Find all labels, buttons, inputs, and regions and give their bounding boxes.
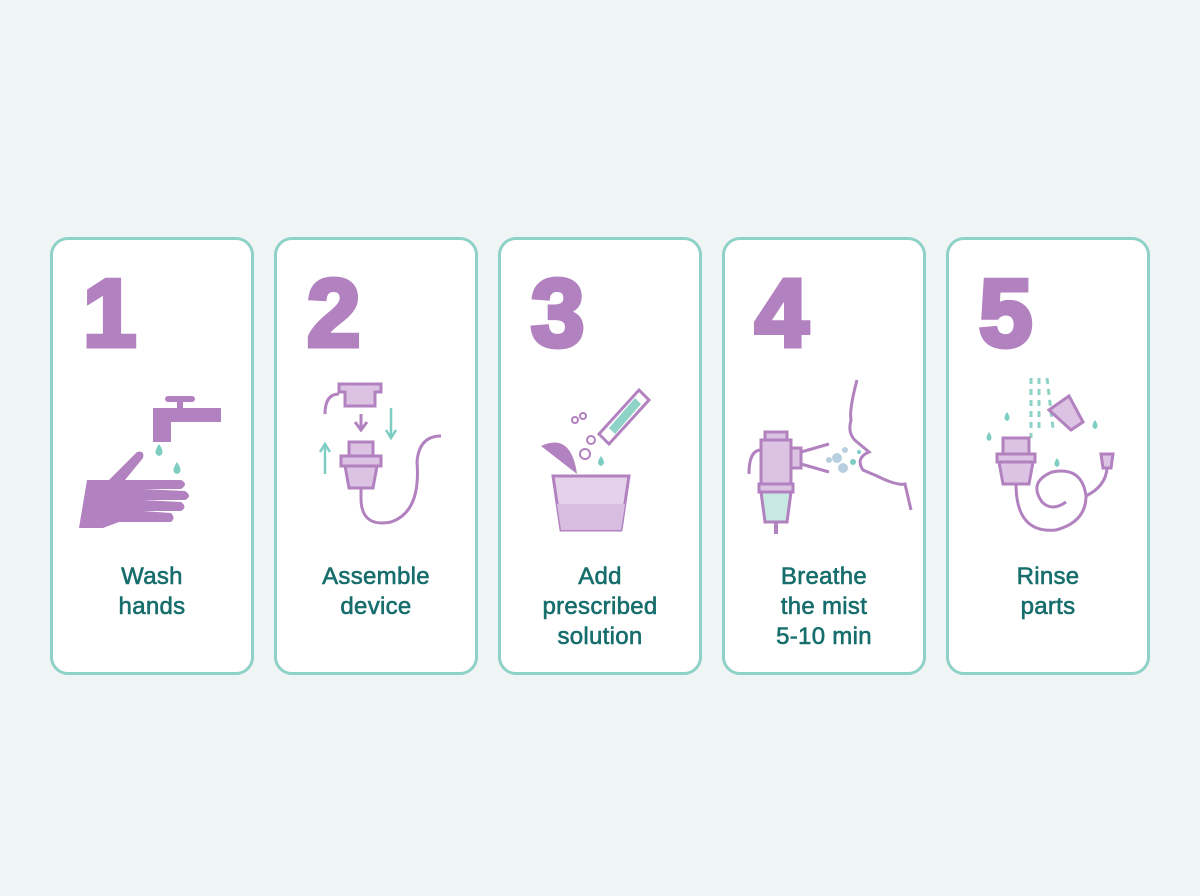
label: prescribed bbox=[542, 593, 658, 620]
label: 5-10 min bbox=[776, 623, 872, 650]
icon: hand under tap bbox=[79, 396, 221, 528]
label: Add bbox=[578, 563, 622, 590]
number 5: 5 bbox=[979, 260, 1032, 367]
label: Rinse bbox=[1017, 563, 1079, 590]
number 1: 1 bbox=[83, 260, 136, 367]
label: the mist bbox=[781, 593, 867, 620]
number 3: 3 bbox=[531, 260, 584, 367]
label bbox=[322, 563, 430, 620]
label: device bbox=[340, 593, 412, 620]
label bbox=[119, 563, 185, 620]
icon: assembling nebulizer bbox=[319, 382, 441, 524]
number 2: 2 bbox=[307, 260, 360, 367]
panel: step 3 add solution bbox=[498, 237, 702, 675]
label: Wash bbox=[121, 563, 183, 590]
panel: step 2 assemble device bbox=[274, 237, 478, 675]
icon: nebulizer and face bbox=[748, 380, 912, 534]
panel: step 1 wash hands bbox=[50, 237, 254, 675]
number 4: 4 bbox=[755, 260, 808, 367]
label bbox=[542, 563, 658, 650]
panel: step 5 rinse parts bbox=[946, 237, 1150, 675]
icon: rinsing parts bbox=[986, 378, 1115, 532]
label: Assemble bbox=[322, 563, 430, 590]
label: hands bbox=[119, 593, 185, 620]
label bbox=[776, 563, 872, 650]
label: parts bbox=[1021, 593, 1075, 620]
label: solution bbox=[557, 623, 643, 650]
icon: pouring solution into cup bbox=[541, 388, 651, 532]
label: Breathe bbox=[781, 563, 867, 590]
label bbox=[1017, 563, 1079, 620]
panel: step 4 breathe mist bbox=[722, 237, 926, 675]
